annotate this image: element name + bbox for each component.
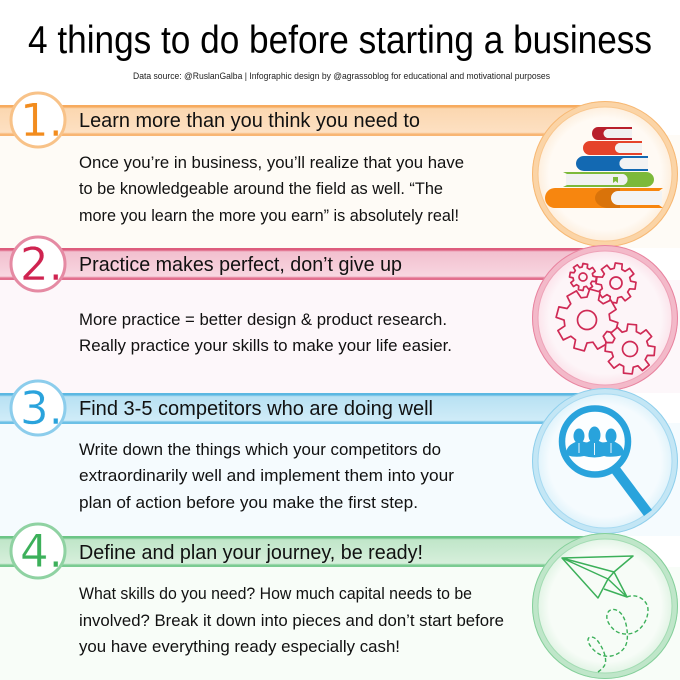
- step 1 body text: more you learn the more you earn” is absolutely real!: [79, 206, 459, 225]
- step 3 body text: Write down the things which your competitors do: [79, 440, 441, 459]
- step 1 body text: Once you’re in business, you’ll realize that you have: [79, 153, 464, 172]
- step 1 heading band: [0, 105, 600, 136]
- step 2 heading: Practice makes perfect, don’t give up: [79, 254, 402, 276]
- step 2 number badge: 2.: [20, 238, 63, 291]
- step 4 body text: involved? Break it down into pieces and don’t start before: [79, 611, 504, 630]
- panel: step 4: [0, 524, 680, 680]
- step 3 heading band: [0, 393, 600, 424]
- step 2 heading band: [0, 248, 600, 280]
- step 2 body text: [79, 310, 452, 355]
- step 2 body text: Really practice your skills to make your life easier.: [79, 336, 452, 355]
- step 3 body text: [79, 440, 454, 512]
- step 4 number badge: 4.: [20, 525, 63, 578]
- step 4 body text: What skills do you need? How much capital needs to be: [79, 584, 472, 603]
- panel: step 1: [0, 93, 680, 248]
- step 4 heading band: [0, 536, 600, 567]
- step 2 body text: More practice = better design & product research.: [79, 310, 447, 329]
- step 4 body text: [79, 584, 504, 656]
- panel: step 3: [0, 381, 680, 536]
- step 3 body text: plan of action before you make the first step.: [79, 493, 418, 512]
- step 3 number badge: 3.: [20, 382, 63, 435]
- step 3 heading: Find 3-5 competitors who are doing well: [79, 398, 433, 420]
- step 4 heading: Define and plan your journey, be ready!: [79, 542, 423, 564]
- step 3 body text: extraordinarily well and implement them into your: [79, 466, 454, 485]
- icon: magnifying glass over people: [532, 388, 678, 534]
- icon: gears: [532, 246, 678, 390]
- data source credit: Data source: @RuslanGalba | Infographic design by @agrassoblog for educational and motivational purposes: [133, 71, 550, 81]
- icon: stack of books: [532, 102, 678, 246]
- step 1 number badge: 1.: [20, 94, 63, 147]
- step 1 body text: to be knowledgeable around the field as well. “The: [79, 179, 443, 198]
- step 1 body text: [79, 153, 464, 225]
- icon: paper plane with dashed trail: [532, 534, 678, 678]
- step 4 body text: you have everything ready especially cash!: [79, 637, 400, 656]
- step 1 heading: Learn more than you think you need to: [79, 110, 420, 132]
- panel: step 2: [0, 237, 680, 393]
